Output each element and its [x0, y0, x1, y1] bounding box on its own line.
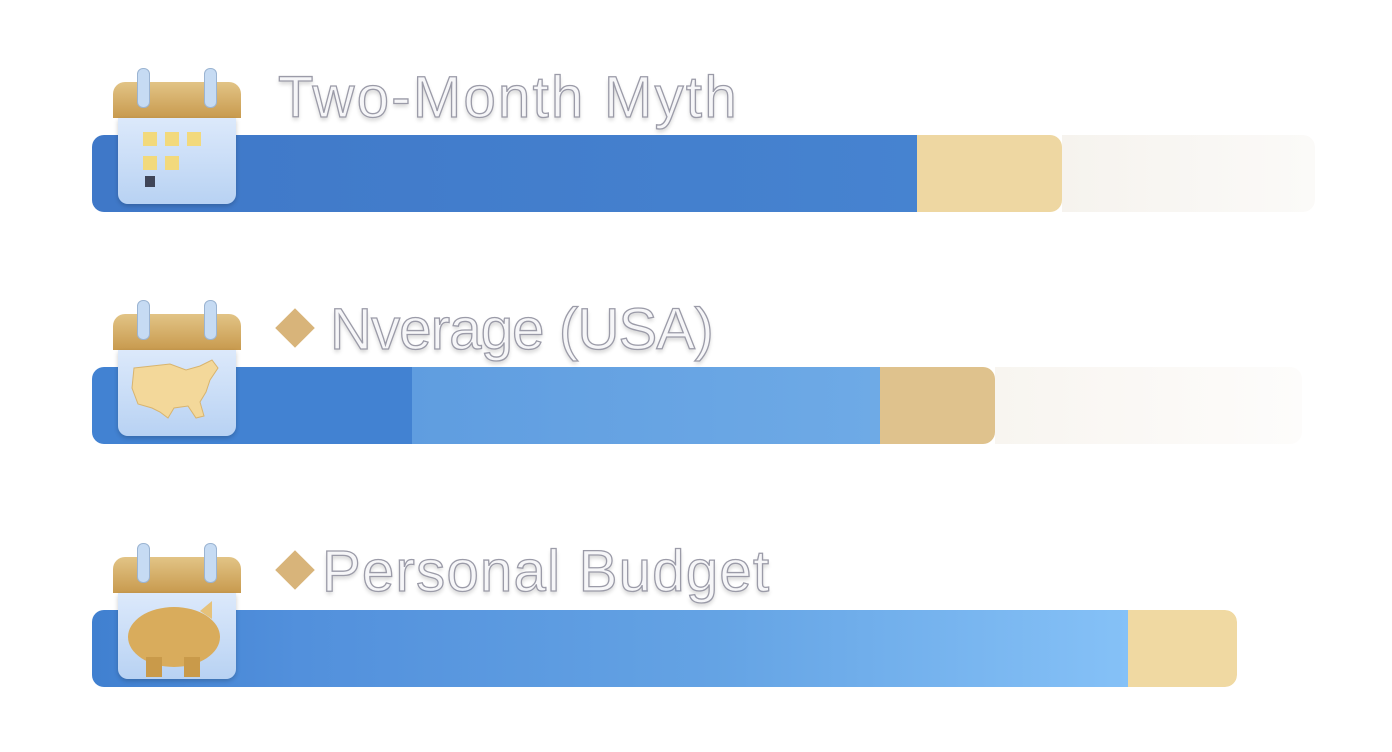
- diamond: [275, 550, 315, 590]
- icon: calendar with piggy bank: [113, 543, 241, 683]
- row 1: Two-Month Myth: [92, 65, 1288, 212]
- bar 2: [92, 367, 1190, 444]
- row 3: Personal Budget: [92, 539, 1237, 687]
- bar 3: [92, 610, 1237, 687]
- title: Nverage (USA): Nverage (USA): [330, 297, 713, 362]
- bar 1: [92, 135, 1288, 212]
- icon: calendar with grid: [113, 68, 241, 208]
- title: Two-Month Myth: Two-Month Myth: [278, 65, 739, 130]
- row 2: Nverage (USA): [92, 297, 1190, 444]
- diamond: [275, 308, 315, 348]
- icon: calendar with USA map: [113, 300, 241, 440]
- title: Personal Budget: Personal Budget: [322, 539, 770, 604]
